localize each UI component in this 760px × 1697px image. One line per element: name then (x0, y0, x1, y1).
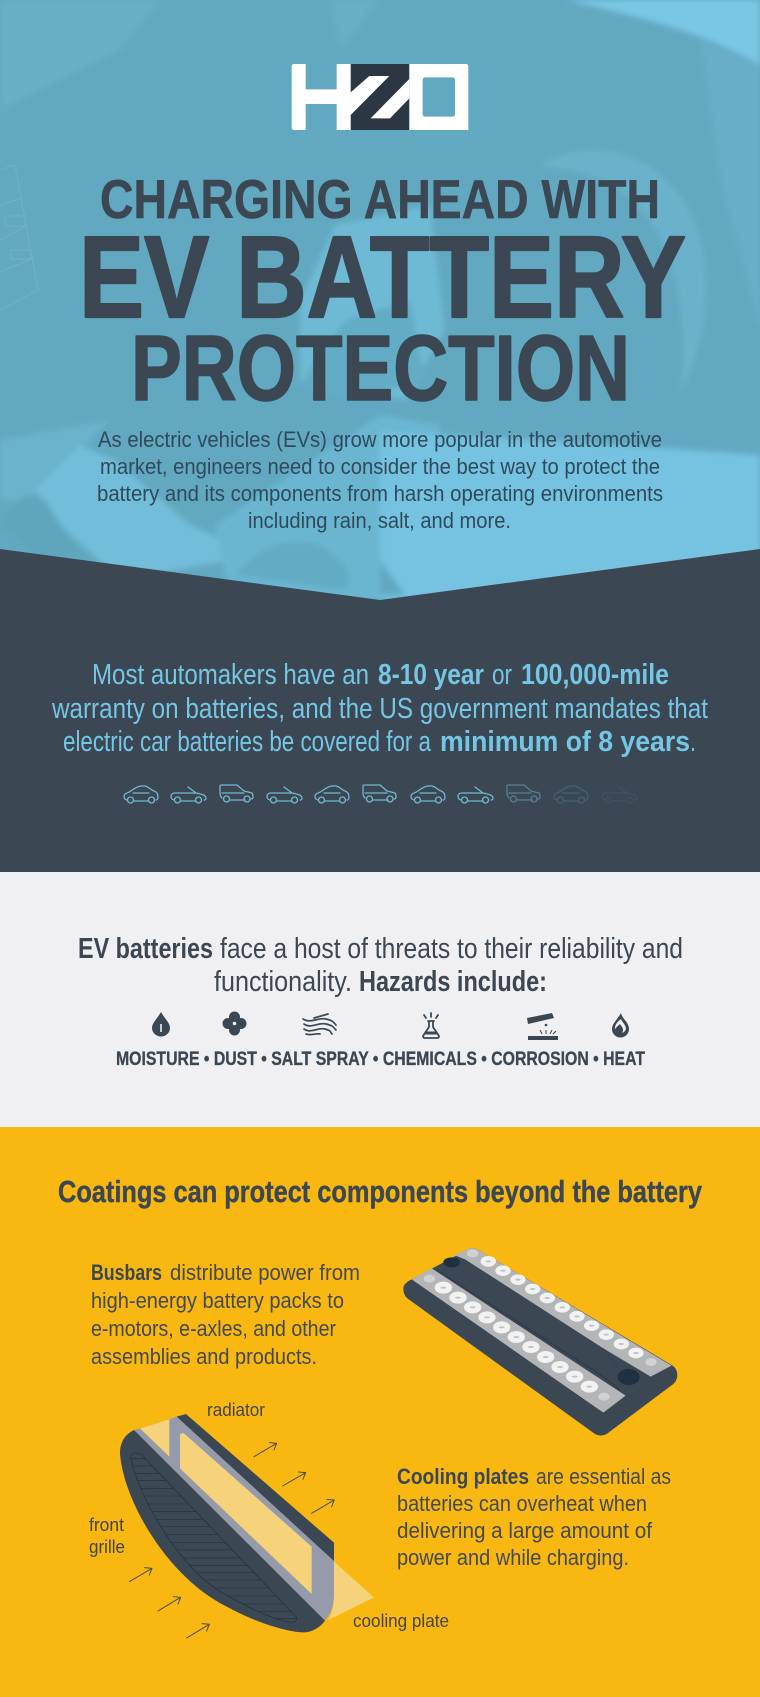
busbars text: assemblies and products. (91, 1344, 317, 1369)
icon: heat flame (612, 1013, 629, 1038)
warranty statement: Most automakers have an (92, 659, 369, 691)
title: PROTECTION (131, 316, 630, 420)
hazards intro text: functionality. (214, 966, 352, 998)
warranty statement: minimum of 8 years (440, 726, 690, 758)
decorative dashboard icon ghost (0, 165, 38, 310)
label: cooling plate: cooling plate (353, 1611, 449, 1631)
intro paragraph (97, 427, 663, 533)
intro paragraph: including rain, salt, and more. (248, 508, 511, 533)
busbars text: Busbars (91, 1260, 162, 1285)
panel: hazards (0, 872, 760, 1127)
warranty statement: . (690, 726, 696, 758)
cooling plates text: delivering a large amount of (397, 1518, 653, 1543)
hazards list: MOISTURE • DUST • SALT SPRAY • CHEMICALS • CORROSION • HEAT (116, 1049, 645, 1070)
cooling plates text: power and while charging. (397, 1545, 629, 1570)
busbars text: distribute power from (170, 1260, 360, 1285)
cooling plates text: Cooling plates (397, 1464, 529, 1489)
warranty statement: 100,000-mile (521, 659, 669, 691)
busbars text: high-energy battery packs to (91, 1288, 344, 1313)
cooling plates text (397, 1464, 671, 1570)
hazards intro text: Hazards include: (359, 966, 547, 998)
label: front grille: grille (89, 1537, 125, 1557)
busbars text (91, 1260, 360, 1369)
busbars text: e-motors, e-axles, and other (91, 1316, 336, 1341)
label: front grille: front (89, 1515, 124, 1535)
icon: salt spray waves (303, 1014, 336, 1035)
row of car icons (124, 785, 637, 803)
icon: chemicals flask (423, 1013, 439, 1038)
cooling system illustration (120, 1414, 374, 1638)
icon: corrosion (527, 1013, 558, 1040)
title: CHARGING AHEAD WITH (100, 168, 660, 230)
panel: warranty (0, 549, 760, 872)
intro paragraph: battery and its components from harsh operating environments (97, 481, 663, 506)
warranty statement: or (492, 659, 512, 691)
warranty statement: electric car batteries be covered for a (63, 726, 432, 758)
cooling plates text: batteries can overheat when (397, 1491, 647, 1516)
icon: dust fan (222, 1012, 246, 1036)
warranty statement: 8-10 year (378, 659, 484, 691)
intro paragraph: market, engineers need to consider the best way to protect the (100, 454, 660, 479)
logo: HZO (292, 64, 468, 130)
cooling plates text: are essential as (536, 1464, 671, 1489)
title (79, 168, 686, 420)
label: front grille (89, 1515, 125, 1557)
hazards intro text: EV batteries (78, 933, 213, 965)
panel: coatings (58, 1180, 702, 1638)
hazards intro text: face a host of threats to their reliability and (220, 933, 683, 965)
intro paragraph: As electric vehicles (EVs) grow more popular in the automotive (98, 427, 662, 452)
airflow arrows (129, 1443, 334, 1638)
hazards intro text (78, 933, 683, 998)
icon: moisture drop (152, 1012, 170, 1036)
label: radiator: radiator (207, 1400, 265, 1420)
warranty statement (51, 659, 708, 758)
busbar illustration (403, 1248, 677, 1436)
hero background: blurred EV charger photo (0, 0, 760, 600)
